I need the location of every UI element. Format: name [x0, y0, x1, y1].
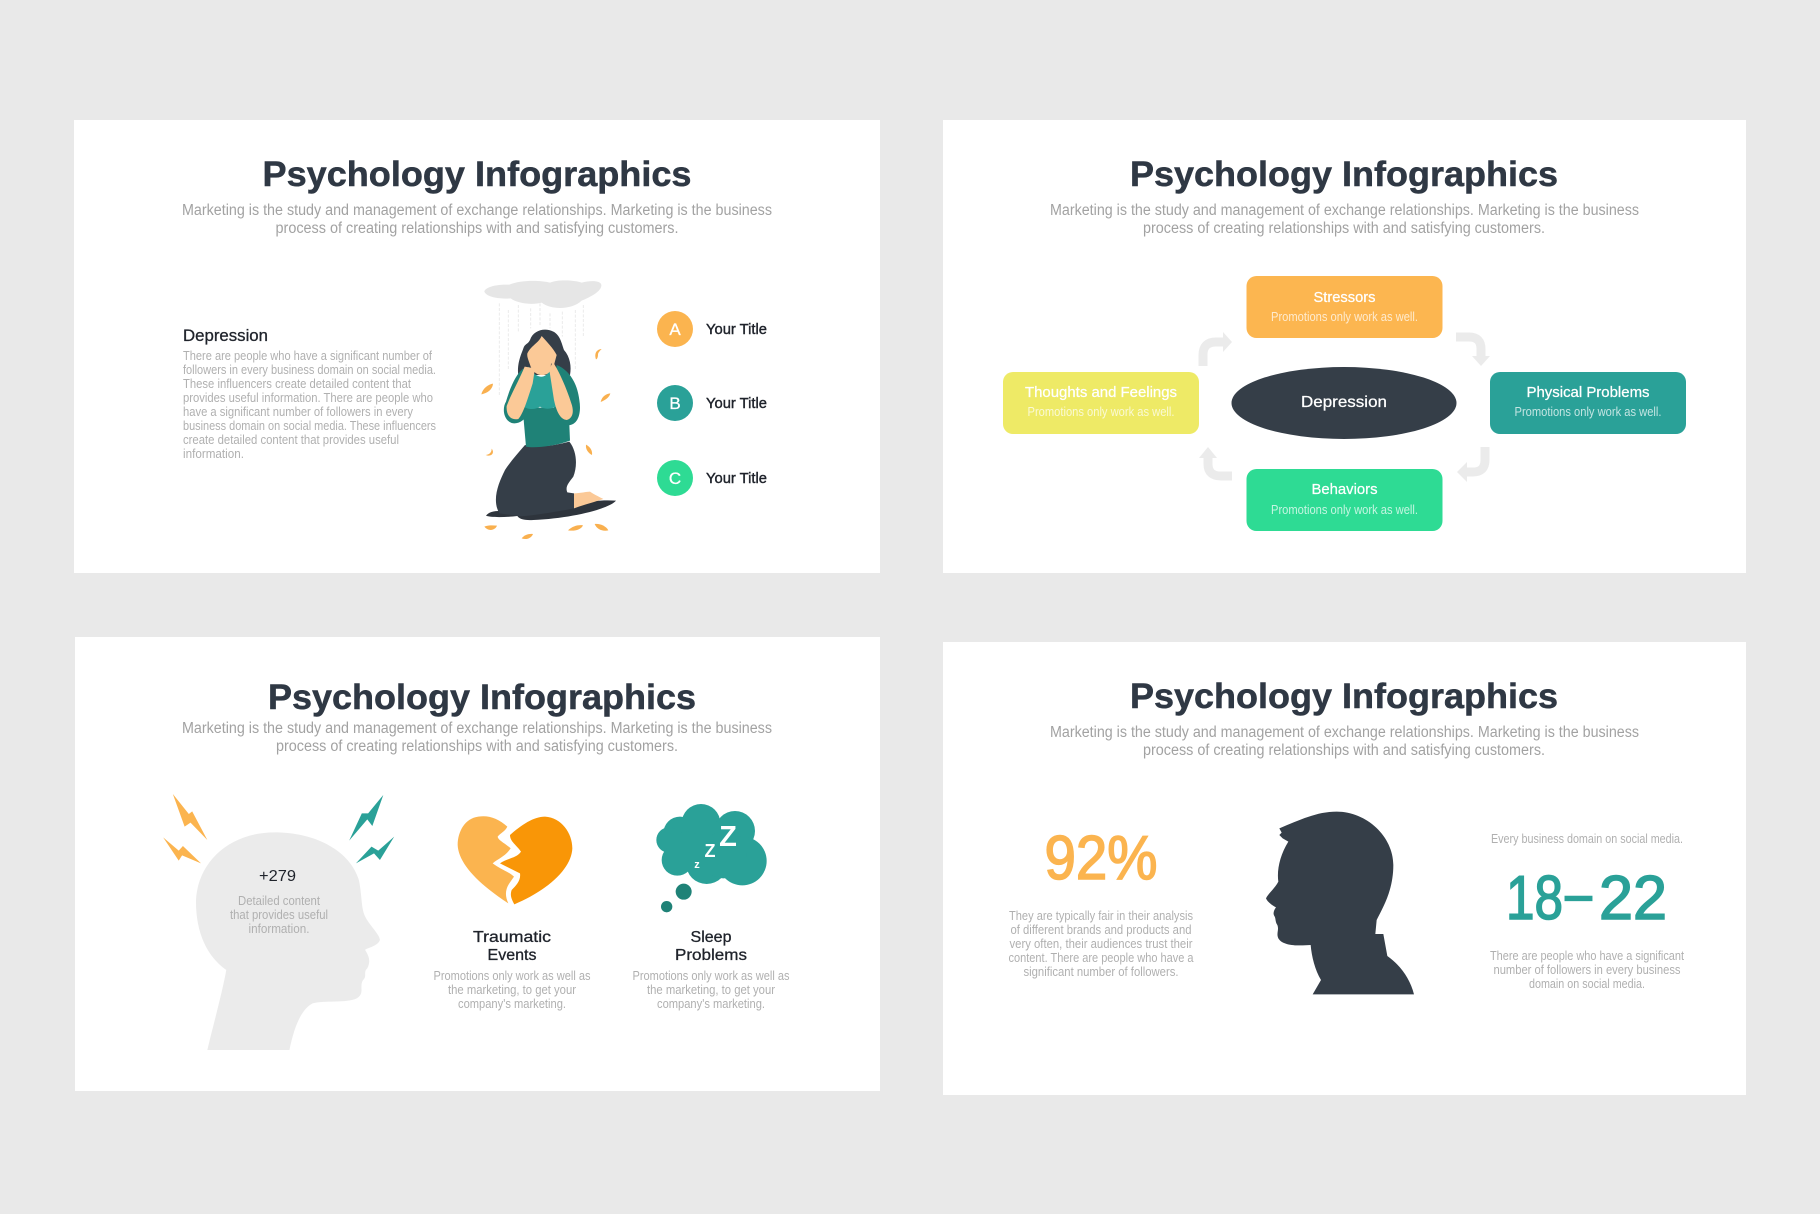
- text: +279 in head: Detailed content: [238, 893, 320, 908]
- title: Psychology Infographics: [262, 155, 692, 194]
- arrow: top left: [1203, 332, 1232, 366]
- arrow: top right: [1456, 337, 1490, 366]
- center ellipse: depression: [1232, 367, 1456, 439]
- stat: 92%: of different brands and products and: [1010, 922, 1192, 937]
- text: sleep problems: company's marketing.: [657, 996, 765, 1011]
- text: sleep problems: the marketing, to get your: [647, 982, 776, 997]
- icon: sleep thought cloud: z: [694, 859, 700, 871]
- text block: depression: There are people who have a significant number of: [183, 348, 432, 363]
- text: sleep problems: Promotions only work as well as: [632, 968, 790, 983]
- box: thoughts and feelings: Promotions only work as well.: [1028, 405, 1174, 419]
- box: behaviors: Promotions only work as well.: [1271, 503, 1418, 517]
- subtitle: [1050, 724, 1639, 759]
- icon: broken heart: [458, 816, 572, 904]
- text block: depression: provides useful information. There are people who: [183, 390, 433, 405]
- subtitle: Marketing is the study and management of exchange relationships. Marketing is the business: [182, 202, 772, 219]
- icon: grey head with lightning: [163, 794, 394, 1050]
- stat: 18-22: [1490, 831, 1684, 991]
- subtitle: process of creating relationships with and satisfying customers.: [1143, 220, 1545, 237]
- panel: depression cycle: [943, 120, 1746, 573]
- text block: depression: business domain on social media. These influencers: [183, 418, 436, 433]
- box: stressors: [1246, 276, 1442, 338]
- list item A: Your Title: [706, 322, 767, 338]
- text: traumatic events: Events: [488, 947, 537, 964]
- text: +279 in head: information.: [248, 921, 310, 936]
- stat: 18-22: domain on social media.: [1529, 976, 1645, 991]
- stat: 18-22: There are people who have a significant: [1490, 948, 1684, 963]
- subtitle: [182, 720, 772, 755]
- text block: depression: have a significant number of followers in every: [183, 404, 413, 419]
- list item A: [657, 311, 767, 347]
- subtitle: [182, 202, 772, 237]
- box: stressors: Stressors: [1314, 290, 1376, 306]
- subtitle: process of creating relationships with and satisfying customers.: [276, 220, 678, 237]
- icon: sleep thought cloud: Z: [704, 841, 716, 861]
- text: traumatic events: the marketing, to get your: [448, 982, 577, 997]
- title: Psychology Infographics: [268, 678, 696, 717]
- subtitle: Marketing is the study and management of exchange relationships. Marketing is the business: [182, 720, 772, 737]
- list item B: Your Title: [706, 396, 767, 412]
- stat: 92%: They are typically fair in their analysis: [1009, 908, 1193, 923]
- text: traumatic events: Promotions only work as well as: [434, 968, 591, 983]
- stat: 92%: very often, their audiences trust their: [1010, 936, 1193, 951]
- subtitle: Marketing is the study and management of exchange relationships. Marketing is the business: [1050, 202, 1639, 219]
- stat: 18-22: –: [1565, 859, 1592, 928]
- panel: statistics and silhouette: [943, 642, 1746, 1095]
- arrow: bottom left: [1199, 447, 1232, 476]
- box: behaviors: [1246, 469, 1442, 531]
- text: traumatic events: [434, 929, 591, 1011]
- text block: depression: create detailed content that provides useful: [183, 432, 399, 447]
- icon: woman crying under rain cloud: [481, 280, 616, 539]
- box: physical problems: Physical Problems: [1526, 385, 1650, 401]
- subtitle: process of creating relationships with and satisfying customers.: [276, 738, 678, 755]
- text: +279 in head: +279: [259, 868, 296, 885]
- stat: 18-22: Every business domain on social media.: [1491, 831, 1683, 846]
- list item B: [657, 385, 767, 421]
- subtitle: Marketing is the study and management of exchange relationships. Marketing is the business: [1050, 724, 1639, 741]
- icon: sleep thought cloud: [656, 804, 767, 912]
- text: sleep problems: [632, 929, 790, 1011]
- stat: 92%: [1008, 824, 1194, 979]
- box: physical problems: Promotions only work as well.: [1514, 405, 1662, 419]
- arrow: bottom right: [1457, 447, 1485, 482]
- stat: 92%: significant number of followers.: [1024, 964, 1178, 979]
- center ellipse: depression: Depression: [1301, 394, 1387, 411]
- panel: depression illustration: [74, 120, 880, 573]
- box: physical problems: [1490, 372, 1686, 434]
- text: sleep problems: Sleep: [690, 929, 732, 946]
- stat: 92%: content. There are people who have a: [1008, 950, 1194, 965]
- stat: 18-22: 22: [1599, 864, 1667, 933]
- list item C: Your Title: [706, 471, 767, 487]
- text: +279 in head: [230, 868, 328, 936]
- text block: depression: Depression: [183, 327, 268, 345]
- title: Psychology Infographics: [1130, 677, 1558, 716]
- stat: 18-22: number of followers in every business: [1494, 962, 1681, 977]
- box: thoughts and feelings: Thoughts and Feelings: [1025, 385, 1177, 401]
- stat: 18-22: 18: [1506, 864, 1563, 933]
- text: +279 in head: that provides useful: [230, 907, 328, 922]
- text: sleep problems: Problems: [675, 947, 747, 964]
- text block: depression: These influencers create detailed content that: [183, 376, 411, 391]
- list item B: B: [669, 394, 681, 413]
- icon: sleep thought cloud: Z: [719, 821, 737, 853]
- box: thoughts and feelings: [1003, 372, 1199, 434]
- text: traumatic events: company's marketing.: [458, 996, 566, 1011]
- text block: depression: information.: [183, 446, 244, 461]
- subtitle: [1050, 202, 1639, 237]
- box: stressors: Promotions only work as well.: [1271, 310, 1418, 324]
- panel: head and symptoms: [75, 637, 880, 1091]
- box: behaviors: Behaviors: [1312, 482, 1378, 498]
- text: traumatic events: Traumatic: [473, 929, 551, 946]
- stat: 92%: 92%: [1044, 824, 1158, 893]
- list item C: C: [669, 469, 681, 488]
- title: Psychology Infographics: [1130, 155, 1558, 194]
- icon: head silhouette: [1266, 812, 1414, 994]
- subtitle: process of creating relationships with and satisfying customers.: [1143, 742, 1545, 759]
- list item A: A: [669, 320, 681, 339]
- list item C: [657, 460, 767, 496]
- text block: depression: [183, 327, 436, 461]
- text block: depression: followers in every business domain on social media.: [183, 362, 436, 377]
